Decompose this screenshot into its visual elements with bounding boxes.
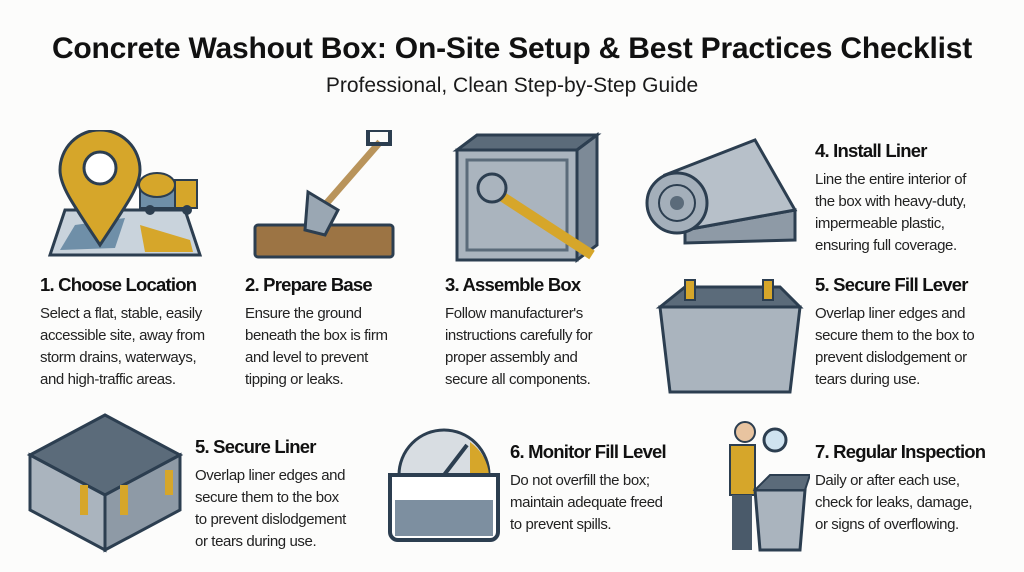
step 5 bottom text	[195, 436, 346, 550]
step 7 text: 7. Regular Inspection	[815, 441, 985, 462]
step 5 bottom text: 5. Secure Liner	[195, 436, 316, 457]
step 7 text: or signs of overflowing.	[815, 516, 959, 533]
step 4 text	[815, 140, 966, 254]
title: Concrete Washout Box: On-Site Setup & Best Practices Checklist	[52, 32, 972, 65]
step 4 text: the box with heavy-duty,	[815, 193, 966, 210]
step 5 top text: Overlap liner edges and	[815, 305, 965, 322]
step 4 text: ensuring full coverage.	[815, 237, 957, 254]
step 5 bottom text: Overlap liner edges and	[195, 467, 345, 484]
step 5 top text	[815, 274, 974, 388]
step 3 text: Follow manufacturer's	[445, 305, 583, 322]
icon: box with straps	[27, 413, 183, 552]
step 6 text: 6. Monitor Fill Level	[510, 441, 666, 462]
step 5 top text: secure them to the box to	[815, 327, 974, 344]
step 3 text	[445, 274, 592, 388]
step 5 top text: 5. Secure Fill Lever	[815, 274, 968, 295]
step 4 text: Line the entire interior of	[815, 171, 966, 188]
step 2 text: and level to prevent	[245, 349, 368, 366]
step 3 text: instructions carefully for	[445, 327, 592, 344]
icon: metal box with wrench	[452, 132, 602, 263]
step 2 text: tipping or leaks.	[245, 371, 343, 388]
step 5 top text: prevent dislodgement or	[815, 349, 967, 366]
step 4 text: impermeable plastic,	[815, 215, 945, 232]
step 1 text: accessible site, away from	[40, 327, 205, 344]
step 6 text: Do not overfill the box;	[510, 472, 650, 489]
icon: map pin with truck	[48, 130, 202, 256]
step 1 text: and high-traffic areas.	[40, 371, 176, 388]
step 7 text	[815, 441, 985, 533]
step 3 text: 3. Assemble Box	[445, 274, 580, 295]
icon: box with clips	[656, 279, 804, 394]
step 4 text: 4. Install Liner	[815, 140, 927, 161]
icon: inspector with box	[729, 421, 810, 552]
step 3 text: secure all components.	[445, 371, 590, 388]
step 5 bottom text: secure them to the box	[195, 489, 339, 506]
step 6 text	[510, 441, 666, 533]
icon: liner roll	[646, 138, 798, 244]
step 1 text: 1. Choose Location	[40, 274, 196, 295]
icon: shovel	[254, 130, 394, 258]
step 1 text: Select a flat, stable, easily	[40, 305, 202, 322]
subtitle: Professional, Clean Step-by-Step Guide	[326, 74, 698, 97]
step 7 text: check for leaks, damage,	[815, 494, 972, 511]
step 3 text: proper assembly and	[445, 349, 577, 366]
step 5 top text: tears during use.	[815, 371, 920, 388]
step 2 text: 2. Prepare Base	[245, 274, 372, 295]
icon: fill gauge	[388, 428, 500, 542]
step 5 bottom text: or tears during use.	[195, 533, 316, 550]
step 6 text: maintain adequate freed	[510, 494, 663, 511]
step 5 bottom text: to prevent dislodgement	[195, 511, 346, 528]
step 7 text: Daily or after each use,	[815, 472, 960, 489]
step 1 text: storm drains, waterways,	[40, 349, 196, 366]
step 1 text	[40, 274, 205, 388]
step 2 text	[245, 274, 388, 388]
step 2 text: Ensure the ground	[245, 305, 362, 322]
step 2 text: beneath the box is firm	[245, 327, 388, 344]
step 6 text: to prevent spills.	[510, 516, 611, 533]
